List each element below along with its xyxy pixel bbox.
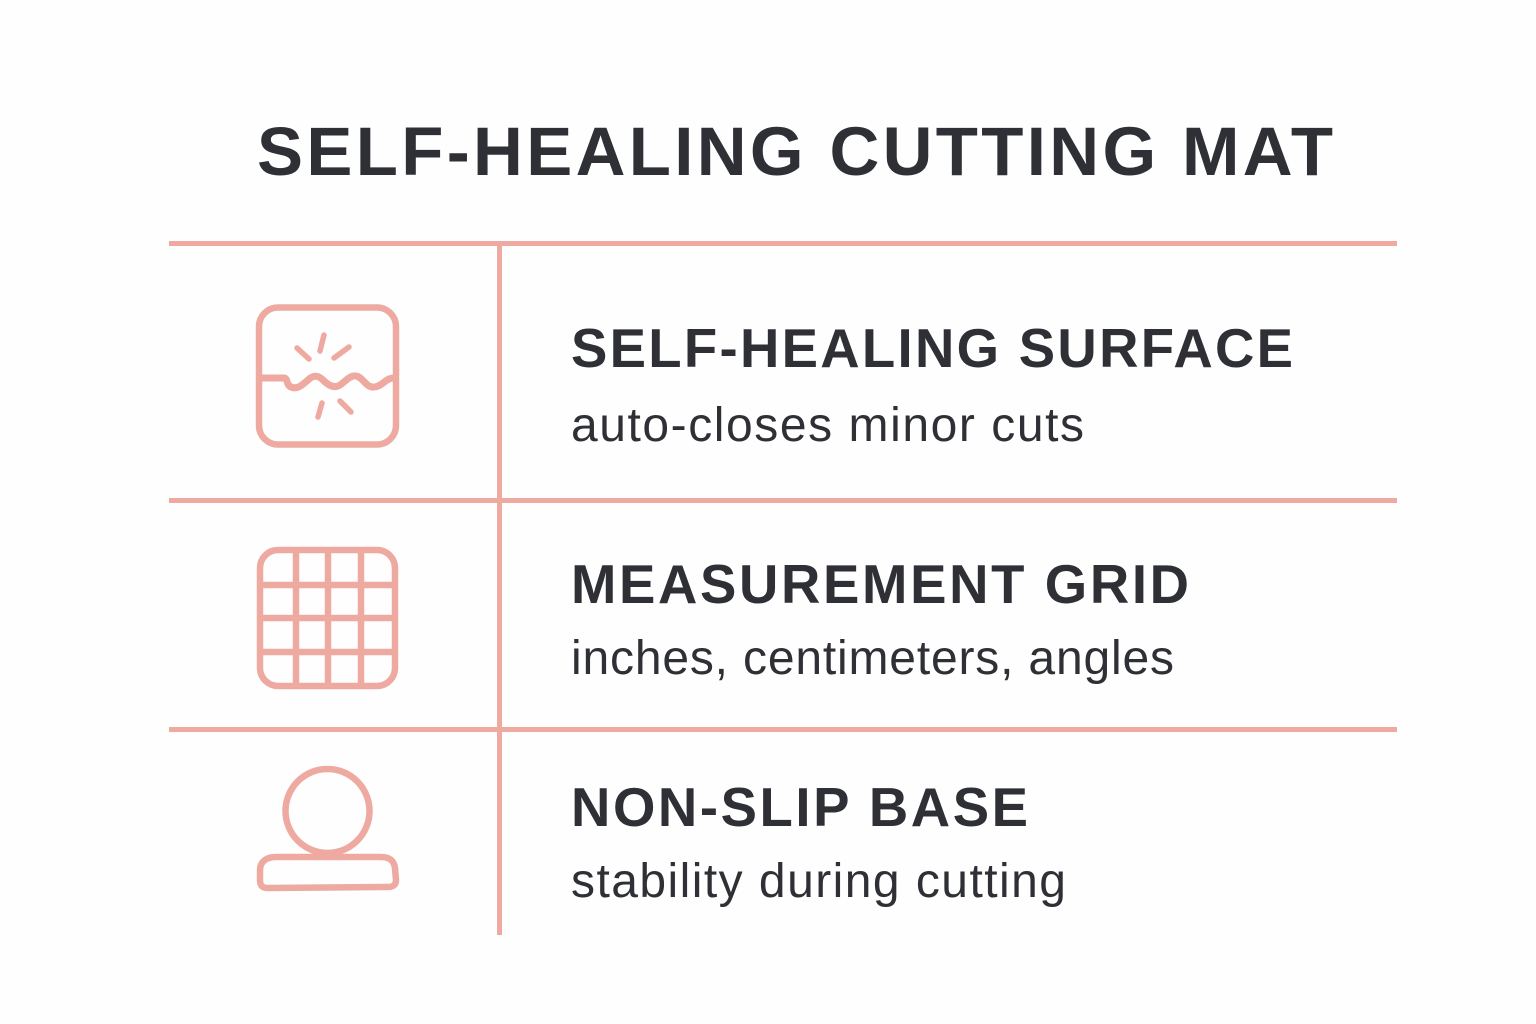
heading: non-slip base: NON-SLIP BASE <box>571 777 1028 838</box>
table grid lines <box>169 241 1397 935</box>
row: measurement grid <box>260 550 1189 686</box>
heading: measurement grid: MEASUREMENT GRID <box>571 554 1189 615</box>
icon: ball on base <box>260 769 396 888</box>
row: self-healing surface <box>259 308 1293 452</box>
heading: self-healing surface: SELF-HEALING SURFACE <box>571 318 1293 379</box>
description: measurement grid: inches, centimeters, angles <box>571 632 1174 685</box>
description: non-slip base: stability during cutting <box>571 855 1066 908</box>
row: non-slip base <box>260 769 1066 908</box>
description: self-healing surface: auto-closes minor cuts <box>571 399 1084 452</box>
icon: healing cut <box>259 308 396 444</box>
title: SELF-HEALING CUTTING MAT <box>257 113 1333 190</box>
icon: grid <box>260 550 395 686</box>
